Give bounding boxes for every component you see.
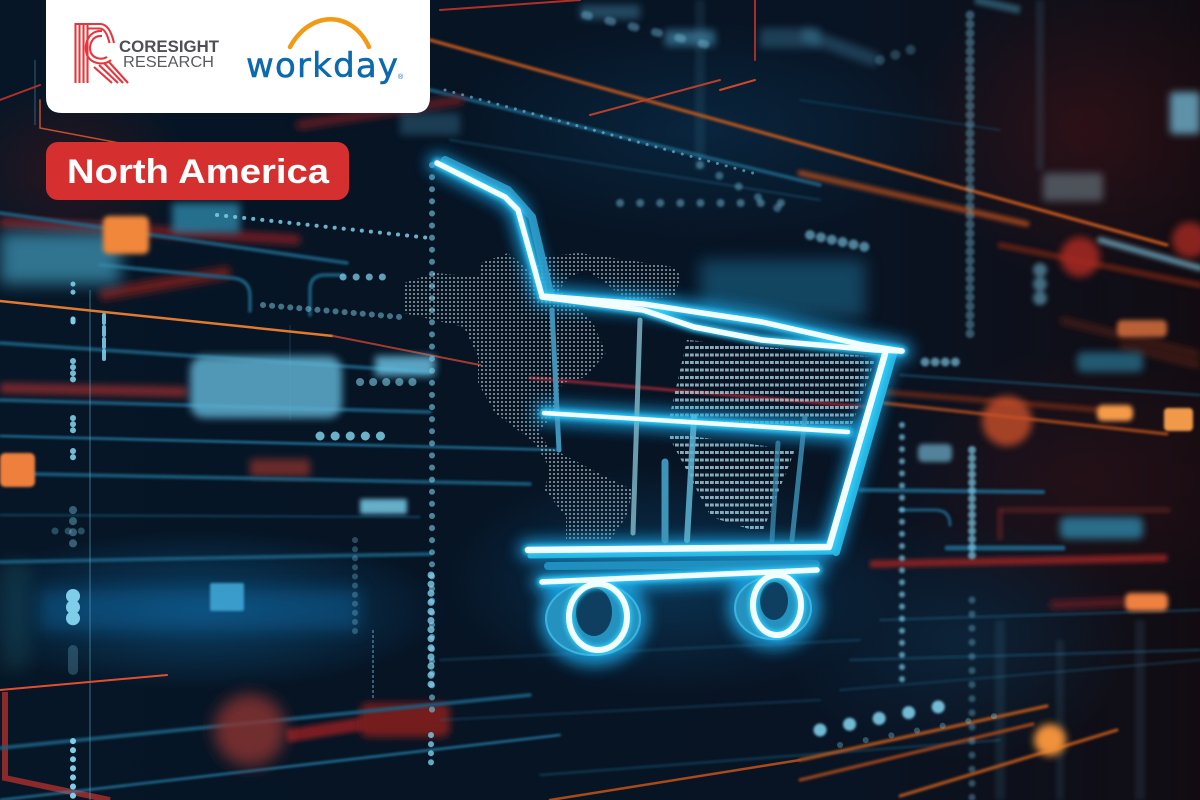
- Coresight logo: [75, 23, 220, 83]
- cart bright outline: [437, 163, 902, 650]
- dotted map of the Americas: [404, 253, 681, 540]
- cart bright halo: [437, 163, 902, 650]
- data text on cart panel: [667, 340, 876, 533]
- region badge: North America: North America: [67, 153, 330, 191]
- Workday logo: ®: [398, 73, 404, 81]
- Coresight logo: RESEARCH: [123, 54, 214, 71]
- Workday logo: [246, 19, 404, 86]
- Workday arc: [290, 19, 369, 47]
- Coresight R mark: [75, 23, 128, 83]
- red bands: [0, 222, 1200, 800]
- Coresight wordmark: CORESIGHT: [119, 37, 220, 56]
- cart back rails: [445, 160, 893, 566]
- cart wheel hubs: [576, 582, 788, 636]
- cart glow: [437, 163, 902, 656]
- Workday wordmark: workday: [246, 46, 398, 86]
- region badge: North America: [46, 142, 349, 200]
- logo panel: [46, 0, 430, 113]
- cart wheels back: [546, 577, 811, 655]
- shopping cart icon: [437, 160, 902, 656]
